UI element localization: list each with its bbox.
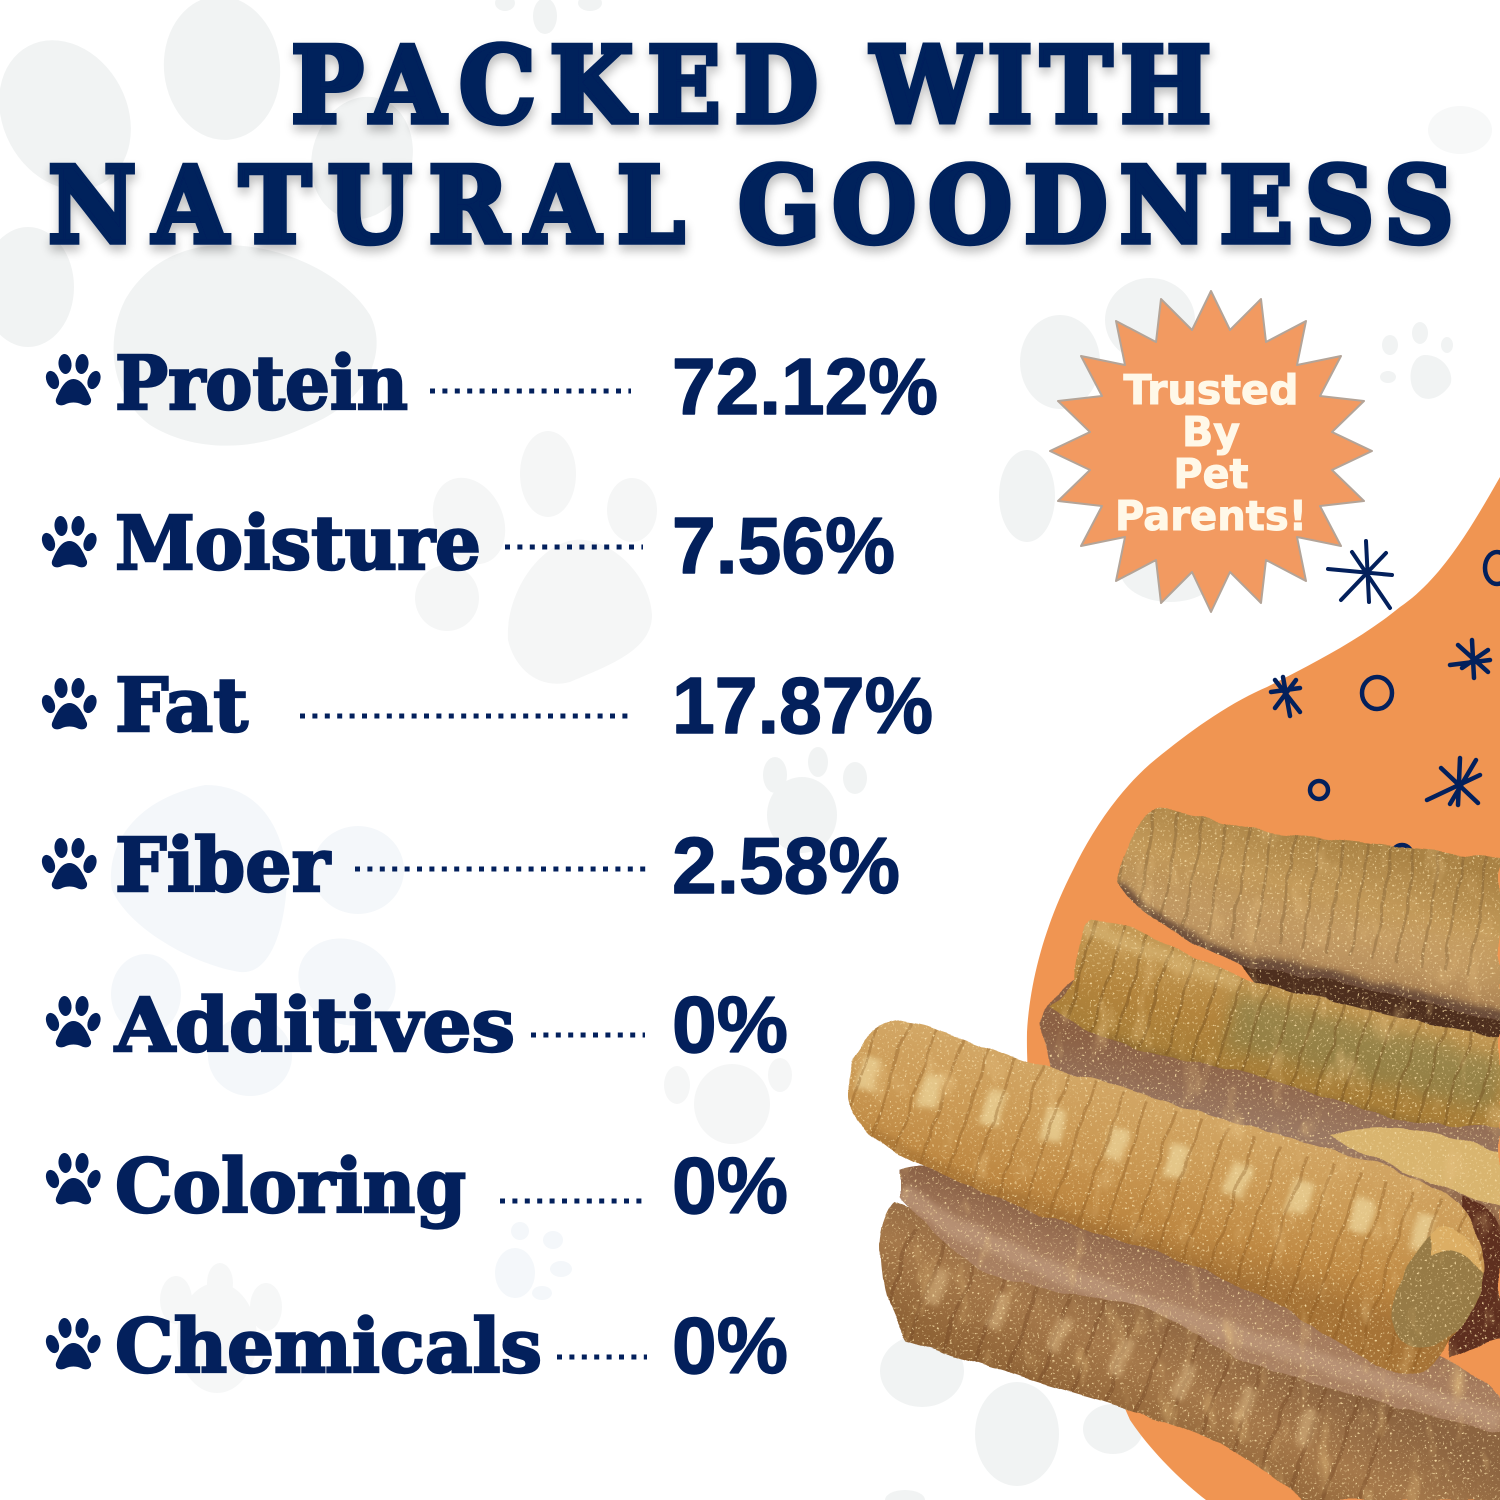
doodle: circle (1362, 677, 1392, 709)
icon: paw (43, 995, 103, 1047)
dotted leader (557, 1354, 647, 1360)
title: WITH (870, 23, 1211, 147)
badge text (1115, 366, 1307, 540)
badge text: By (1182, 408, 1240, 456)
doodle: arc circle (1391, 845, 1413, 871)
row: additives (43, 980, 788, 1069)
flap on lower tube (899, 1165, 1500, 1432)
row: fiber (39, 821, 900, 910)
icon: paw (39, 677, 99, 729)
icon: paw (43, 1317, 103, 1369)
orange blob (1027, 477, 1500, 1500)
icon: paw (43, 1152, 103, 1204)
pale patch between tubes (1330, 1127, 1500, 1205)
value: fiber: 2.58% (672, 821, 900, 910)
badge text: Parents! (1115, 492, 1307, 540)
title (48, 23, 1454, 267)
middle tube (1049, 920, 1500, 1128)
label: chemicals: Chemicals (115, 1304, 542, 1390)
doodle: star lower (1427, 758, 1480, 805)
top tube (1117, 808, 1500, 1021)
value: chemicals: 0% (672, 1301, 788, 1390)
label: moisture: Moisture (115, 501, 481, 587)
doodle: star left (1271, 677, 1300, 716)
back brown tube (1042, 979, 1500, 1225)
doodle: large star (1328, 541, 1392, 608)
label: protein: Protein (115, 341, 408, 427)
title: NATURAL (48, 143, 685, 267)
dotted leader (300, 714, 632, 718)
row: fat (39, 661, 933, 750)
icon: paw (39, 837, 99, 889)
doodle: star right (1450, 640, 1490, 678)
dotted leader (355, 866, 650, 872)
label: fiber: Fiber (115, 823, 331, 909)
dotted leader (430, 388, 631, 394)
row: protein (43, 341, 938, 431)
right dark end piece (1450, 1195, 1500, 1360)
doodle: clipped circle (1485, 552, 1500, 584)
front tube (840, 1010, 1500, 1380)
tube opening (1392, 1228, 1484, 1348)
title: PACKED (291, 23, 818, 147)
doodle: small circle (1310, 781, 1328, 799)
nutrition list (39, 341, 938, 1390)
badge text: Trusted (1124, 366, 1298, 414)
value: protein: 72.12% (672, 342, 938, 431)
badge text: Pet (1174, 450, 1248, 498)
row: coloring (43, 1141, 788, 1230)
title: GOODNESS (738, 143, 1454, 267)
doodles on blob (1271, 541, 1500, 871)
row: chemicals (43, 1301, 788, 1390)
lower tube (870, 1190, 1500, 1500)
background paw prints: pale blue (111, 785, 572, 1300)
row: moisture (39, 501, 895, 590)
icon: paw (39, 515, 99, 567)
value: coloring: 0% (672, 1141, 788, 1230)
label: coloring: Coloring (115, 1144, 466, 1230)
label: fat: Fat (115, 663, 248, 749)
value: fat: 17.87% (672, 661, 933, 750)
label: additives: Additives (114, 983, 515, 1069)
dark shadow band (1240, 960, 1500, 1050)
starburst badge (1050, 291, 1372, 612)
icon: paw (43, 353, 103, 405)
value: additives: 0% (672, 980, 788, 1069)
dotted leader (505, 544, 643, 550)
value: moisture: 7.56% (672, 501, 895, 590)
dotted leader (531, 1032, 645, 1038)
product photo: dried trachea chews (840, 800, 1500, 1500)
dotted leader (500, 1198, 648, 1204)
